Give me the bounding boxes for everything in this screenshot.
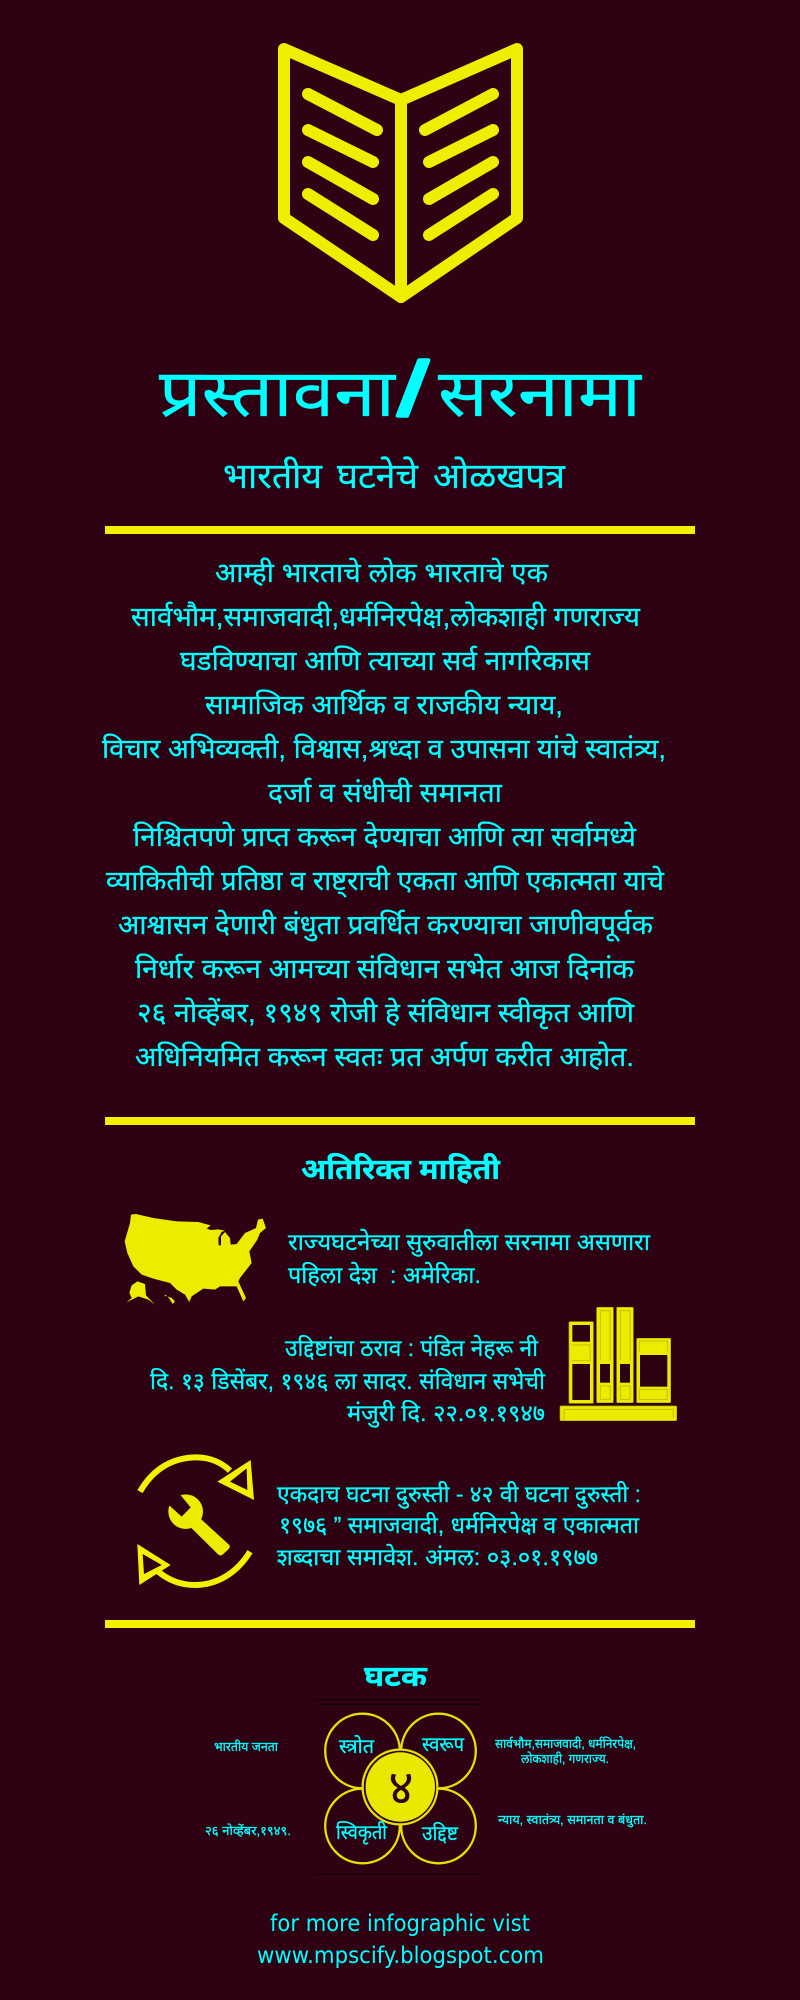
preamble text block: सार्वभौम,समाजवादी,धर्मनिरपेक्ष,लोकशाही गणराज्य xyxy=(131,601,641,632)
title: / xyxy=(398,347,428,431)
text: first country: राज्यघटनेच्या सुरुवातीला सरनामा असणारा xyxy=(288,1229,651,1257)
divider xyxy=(105,1620,695,1628)
subtitle: ओळखपत्र xyxy=(433,456,566,496)
text: single amendment xyxy=(277,1481,641,1570)
footer: www.mpscify.blogspot.com xyxy=(257,1943,544,1969)
diagram: four components xyxy=(313,1700,483,1874)
preamble text block: २६ नोव्हेंबर, १९४९ रोजी हे संविधान स्वीकृत आणि xyxy=(137,997,634,1030)
preamble text block: सामाजिक आर्थिक व राजकीय न्याय, xyxy=(205,689,563,720)
label: nature: लोकशाही, गणराज्य. xyxy=(521,1751,609,1766)
title: सरनामा xyxy=(438,356,643,430)
text: first country: पहिला देश : अमेरिका. xyxy=(288,1262,481,1288)
heading: additional information: अतिरिक्त माहिती xyxy=(301,1153,500,1186)
preamble text block: व्याकितीची प्रतिष्ठा व राष्ट्राची एकता आणि एकात्मता याचे xyxy=(106,865,665,898)
subtitle: भारतीय xyxy=(223,456,323,496)
heading: components: घटक xyxy=(364,1661,428,1693)
divider xyxy=(105,1117,695,1125)
divider xyxy=(105,526,695,534)
preamble text block: अधिनियमित करून स्वतः प्रत अर्पण करीत आहोत. xyxy=(135,1041,634,1072)
diagram: four components: उद्दिष्ट xyxy=(422,1821,458,1845)
text: objectives resolution xyxy=(150,1335,546,1428)
preamble text block: निश्चितपणे प्राप्त करून देण्याचा आणि त्या सर्वामध्ये xyxy=(133,821,637,852)
text: single amendment: एकदाच घटना दुरुस्ती - ४२ वी घटना दुरुस्ती : xyxy=(277,1481,641,1509)
preamble text block xyxy=(102,557,666,1072)
diagram: four components: स्त्रोत xyxy=(339,1734,375,1758)
footer: for more infographic vist xyxy=(270,1911,530,1937)
text: objectives resolution: दि. १३ डिसेंबर, १९४६ ला सादर. संविधान सभेची xyxy=(150,1368,546,1394)
label: objectives: न्याय, स्वातंत्र्य, समानता व बंधुता. xyxy=(498,1813,647,1828)
subtitle xyxy=(223,456,566,496)
footer xyxy=(257,1911,544,1969)
icon: wrench with cycle arrows xyxy=(137,1457,254,1585)
text: first country xyxy=(288,1229,651,1288)
icon: books xyxy=(560,1307,677,1421)
diagram: four components: ४ xyxy=(389,1762,413,1815)
icon: USA map xyxy=(125,1214,266,1305)
title: प्रस्तावना xyxy=(159,356,397,430)
subtitle: घटनेचे xyxy=(337,456,419,496)
label: date: २६ नोव्हेंबर,१९४९. xyxy=(205,1823,291,1838)
diagram: four components: स्विकृती xyxy=(336,1820,388,1845)
title xyxy=(159,347,643,431)
label: nature: सार्वभौम,समाजवादी, धर्मनिरपेक्ष, xyxy=(495,1736,636,1751)
preamble text block: घडविण्याचा आणि त्याच्या सर्व नागरिकास xyxy=(180,645,591,676)
text: single amendment: शब्दाचा समावेश. अंमल: ०३.०१.१९७७ xyxy=(277,1544,598,1570)
text: single amendment: १९७६ ” समाजवादी, धर्मनिरपेक्ष व एकात्मता xyxy=(279,1512,640,1538)
preamble text block: दर्जा व संधीची समानता xyxy=(268,777,503,808)
label: source: भारतीय जनता xyxy=(214,1739,279,1754)
text: objectives resolution: मंजुरी दि. २२.०१.१९४७ xyxy=(347,1400,545,1428)
preamble text block: आम्ही भारताचे लोक भारताचे एक xyxy=(215,557,549,588)
icon: open book xyxy=(284,49,517,297)
text: objectives resolution: उद्दिष्टांचा ठराव : पंडित नेहरू नी xyxy=(285,1335,539,1361)
preamble text block: आश्वासन देणारी बंधुता प्रवर्धित करण्याचा जाणीवपूर्वक xyxy=(118,909,654,942)
preamble text block: निर्धार करून आमच्या संविधान सभेत आज दिनांक xyxy=(135,953,635,984)
preamble text block: विचार अभिव्यक्ती, विश्वास,श्रध्दा व उपासना यांचे स्वातंत्र्य, xyxy=(102,733,666,764)
label: nature xyxy=(495,1736,636,1766)
diagram: four components: स्वरूप xyxy=(422,1734,465,1756)
